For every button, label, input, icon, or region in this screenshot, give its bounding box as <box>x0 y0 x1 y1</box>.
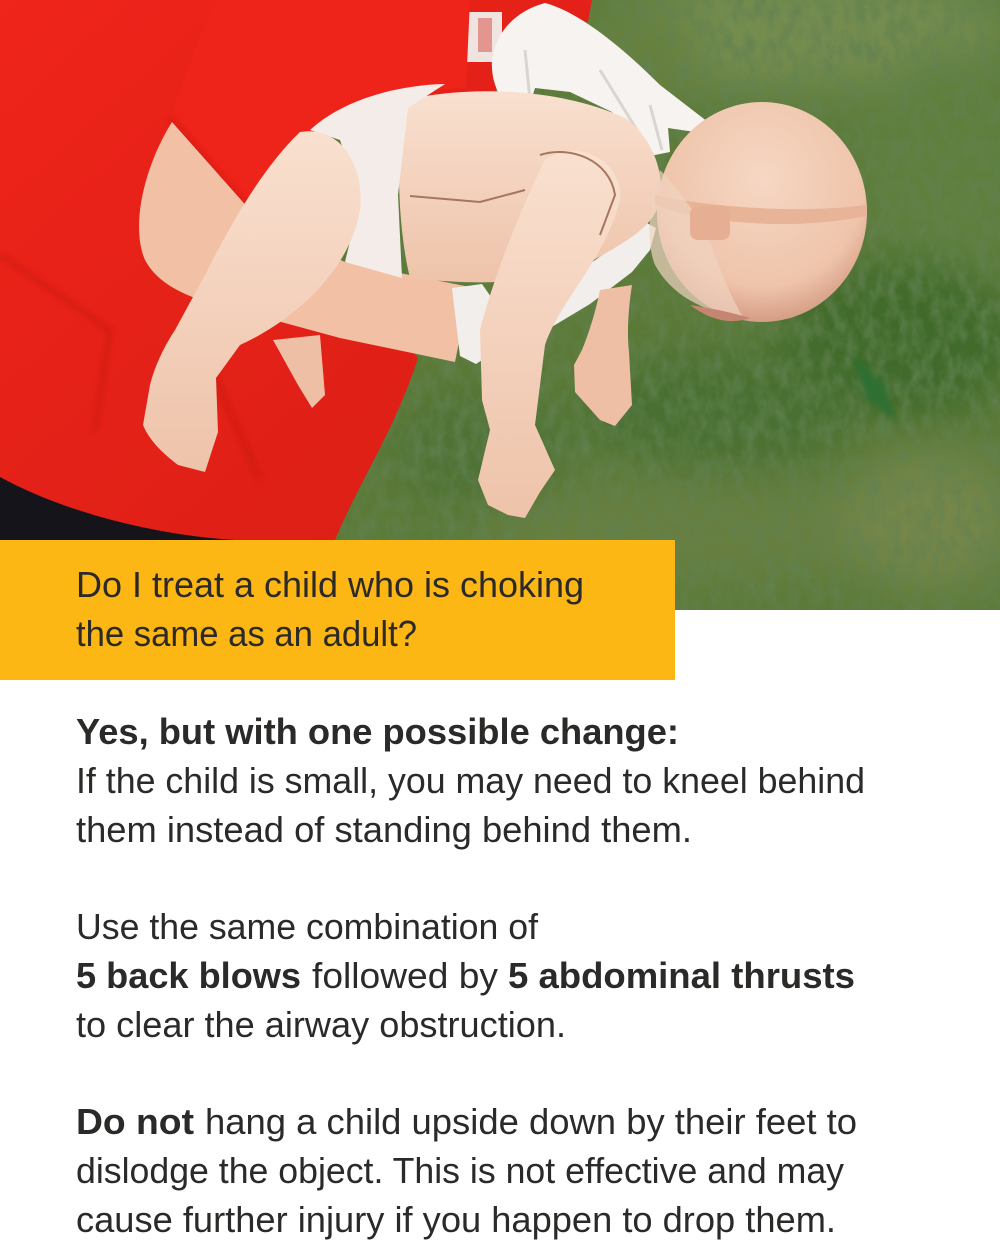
photo: black trousers <box>0 477 235 540</box>
answer block 1: one possible change: If the child is small, you may need to kneel behind <box>76 760 865 801</box>
question text: the same as an adult? <box>76 613 417 654</box>
answer block 3: do not hang upside down <box>76 1101 857 1240</box>
answer block 2: back blows and thrusts <box>76 906 855 1045</box>
photo: shirt badge <box>466 12 502 62</box>
photo: rolled sleeve <box>354 0 470 102</box>
photo: red t-shirt <box>0 0 592 540</box>
photo: infant near arm and hand <box>478 151 620 518</box>
question text: Do I treat a child who is choking <box>76 564 584 605</box>
answer block 2: back blows and thrusts: 5 abdominal thrusts <box>508 955 855 996</box>
answer block 1: one possible change <box>76 711 865 850</box>
answer block 1: one possible change: them instead of standing behind them. <box>76 809 692 850</box>
photo: upper glove <box>492 3 708 156</box>
photo: adult arm <box>139 122 470 362</box>
photo: shirt fold shadows <box>0 118 260 480</box>
photo: infant torso <box>399 91 661 282</box>
answer block 1: one possible change: Yes, but with one possible change: <box>76 711 679 752</box>
photo: glove finger shadow <box>525 50 662 150</box>
photo: infant near leg and foot <box>143 131 361 472</box>
answer block 3: do not hang upside down: dislodge the object. This is not effective and may <box>76 1150 844 1191</box>
photo: far infant arm <box>574 285 632 426</box>
photo: torso seam lines <box>410 152 615 235</box>
photo: infant nappy <box>310 84 445 278</box>
answer block 3: do not hang upside down: Do not <box>76 1101 194 1142</box>
question banner <box>0 540 675 680</box>
photo background: grass <box>330 0 1000 610</box>
answer block 3: do not hang upside down: cause further injury if you happen to drop them. <box>76 1199 836 1240</box>
answer block 2: back blows and thrusts: to clear the airway obstruction. <box>76 1004 566 1045</box>
photo: lower glove <box>452 222 656 364</box>
photo: infant head <box>650 102 867 322</box>
photo: first aider holding infant manikin <box>0 0 1000 610</box>
answer block 3: do not hang upside down: hang a child upside down by their feet to <box>205 1101 857 1142</box>
photo: far infant leg <box>273 335 325 408</box>
answer block 2: back blows and thrusts: 5 back blows <box>76 955 301 996</box>
question text <box>76 564 584 654</box>
answer block 2: back blows and thrusts: Use the same combination of <box>76 906 539 947</box>
answer block 2: back blows and thrusts: followed by <box>312 955 498 996</box>
